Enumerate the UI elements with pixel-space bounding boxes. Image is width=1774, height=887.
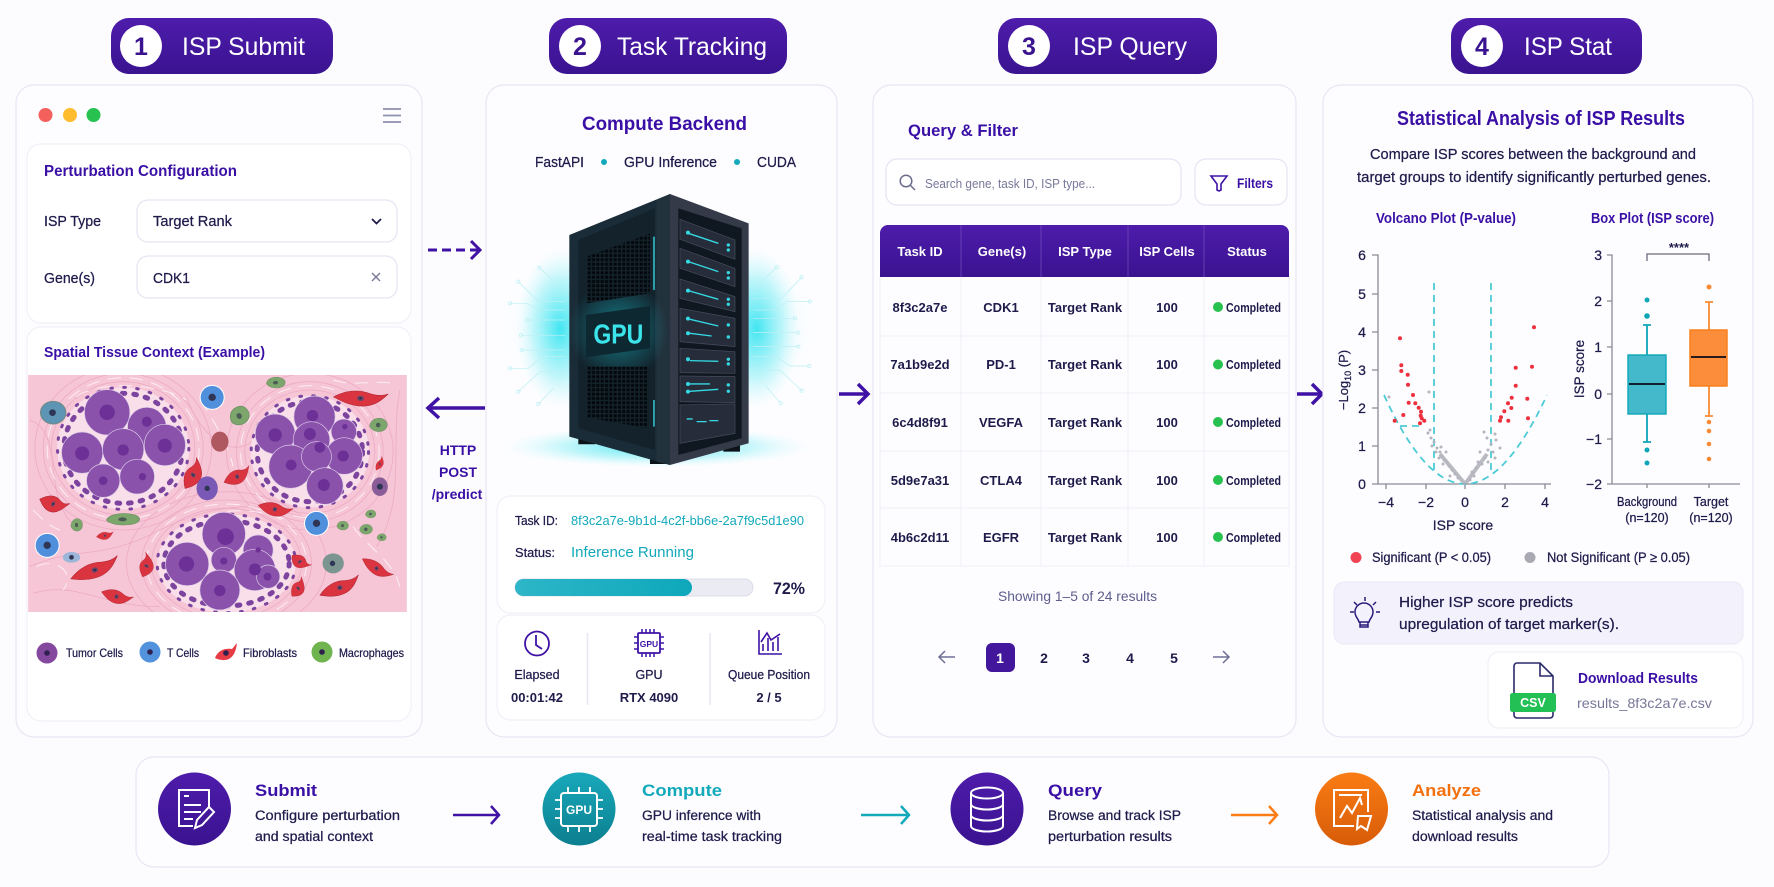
pagination: 1 [996, 650, 1004, 666]
card: spatial tissue context: Spatial Tissue Context (Example) [44, 345, 265, 361]
card: task status: Status: [515, 545, 555, 560]
chart: volcano plot: 6 [1358, 247, 1366, 263]
table row: 6c4d8f91: Target Rank [1048, 415, 1123, 430]
chart: volcano plot [1336, 211, 1551, 533]
legend: cell types [36, 642, 404, 664]
table row: 8f3c2a7e: Target Rank [1048, 300, 1123, 315]
step: Analyze [1315, 772, 1553, 846]
table row: 4b6c2d11 [891, 530, 1281, 545]
chart: volcano plot: 4 [1358, 324, 1366, 340]
pagination: 3 [1082, 650, 1090, 666]
table header row: ISP Type [1058, 244, 1112, 259]
step: Query [950, 772, 1181, 846]
card: perturbation configuration: Gene(s) [44, 271, 95, 287]
arrow: backend to query [839, 384, 868, 404]
icon: CSV file [1510, 663, 1556, 718]
chart: volcano plot: 10 [1343, 371, 1353, 381]
description [1357, 146, 1711, 186]
legend item: fibroblasts: Fibroblasts [243, 646, 297, 660]
chart: box plot: 3 [1594, 247, 1602, 263]
chart: box plot: Background [1617, 495, 1677, 509]
icon: clock [525, 632, 549, 656]
icon: GPU server tower: GPU [593, 318, 643, 349]
pagination: 5 [1170, 650, 1178, 666]
chart: box plot: −1 [1586, 431, 1602, 447]
step: Compute: Compute [642, 781, 722, 800]
icon: database [950, 772, 1024, 846]
results count: Showing 1–5 of 24 results [998, 589, 1157, 604]
metric: queue position: 2 / 5 [756, 690, 782, 705]
pagination: 4 [1126, 650, 1134, 666]
table row: 4b6c2d11: Completed [1226, 530, 1281, 545]
icon: GPU chip [634, 629, 664, 657]
icon: GPU chip: GPU [640, 639, 658, 649]
table row: 5d9e7a31 [891, 473, 1281, 488]
arrow: submit to compute [453, 806, 499, 824]
panel: workflow summary [136, 757, 1609, 867]
card: download results [1488, 652, 1743, 728]
metric: queue position [728, 668, 810, 705]
icon: submit form [158, 772, 231, 846]
step: Analyze: Analyze [1412, 781, 1481, 800]
window controls [38, 108, 401, 122]
chart: box plot: Box Plot (ISP score) [1591, 211, 1714, 227]
chart: box plot: Target [1694, 495, 1729, 509]
step header 4: ISP Stat [1451, 18, 1642, 74]
table row: 8f3c2a7e [893, 300, 1281, 315]
step: Query: perturbation results [1048, 829, 1172, 844]
results table [880, 225, 1289, 566]
metric: queue position: Queue Position [728, 668, 810, 682]
pagination [939, 643, 1229, 672]
table row: 8f3c2a7e: 8f3c2a7e [893, 300, 947, 315]
metric: GPU [620, 668, 678, 705]
panel: ISP Stat [1323, 85, 1753, 737]
legend item: macrophages: Macrophages [339, 646, 404, 660]
table row: 5d9e7a31: CTLA4 [980, 473, 1023, 488]
table row: 4b6c2d11: EGFR [983, 530, 1020, 545]
tech stack row: CUDA [757, 155, 796, 171]
panel: ISP Query [873, 85, 1296, 737]
step: Compute: GPU inference with [642, 808, 761, 823]
step header 1: ISP Submit: 1 [134, 33, 148, 61]
arrow: dashed submit to backend [428, 241, 480, 259]
card: download results: Download Results [1578, 670, 1698, 687]
card: task status: Inference Running [571, 544, 694, 561]
card: perturbation configuration: Target Rank [153, 214, 233, 230]
icon: GPU server tower [503, 194, 817, 467]
step: Query: Query [1048, 781, 1103, 800]
callout: interpretation [1334, 582, 1743, 644]
chart: volcano plot: 4 [1541, 494, 1549, 510]
table row: 8f3c2a7e: 100 [1156, 300, 1178, 315]
arrow: response back to submit [428, 398, 485, 418]
chart: volcano plot: 3 [1358, 362, 1366, 378]
step header 3: ISP Query: ISP Query [1073, 33, 1187, 61]
chart: volcano plot: (P) [1336, 350, 1351, 371]
icon: GPU chip badge: GPU [566, 803, 592, 817]
icon: CSV file: CSV [1520, 696, 1547, 710]
step: Submit: Configure perturbation [255, 808, 400, 823]
tissue illustration [28, 367, 407, 635]
chart: box plot: −2 [1586, 476, 1602, 492]
chart: box plot: **** [1669, 240, 1690, 255]
table row: 4b6c2d11: 4b6c2d11 [891, 530, 949, 545]
tech stack row [535, 155, 796, 171]
card: task status: 72% [773, 579, 805, 598]
search field [886, 159, 1181, 205]
table row: 4b6c2d11: 100 [1156, 530, 1178, 545]
table header row: Task ID [897, 244, 943, 259]
step header 1: ISP Submit: ISP Submit [182, 33, 305, 61]
step header 3: ISP Query [998, 18, 1217, 74]
card: perturbation configuration: Perturbation Configuration [44, 163, 237, 180]
callout: interpretation: Higher ISP score predicts [1399, 594, 1573, 611]
step header 3: ISP Query: 3 [1022, 33, 1036, 61]
step: Submit [158, 772, 400, 846]
table row: 8f3c2a7e: CDK1 [983, 300, 1019, 315]
card: download results: results_8f3c2a7e.csv [1577, 695, 1712, 711]
table header row: ISP Cells [1139, 244, 1195, 259]
legend item: fibroblasts [215, 643, 297, 660]
table header row [880, 225, 1289, 277]
metric: elapsed: 00:01:42 [511, 690, 563, 705]
tech stack row: GPU Inference [624, 155, 717, 171]
chart: box plot: (n=120) [1625, 511, 1669, 525]
chart: box plot: 0 [1594, 386, 1602, 402]
table row: 7a1b9e2d: PD-1 [986, 357, 1016, 372]
table row: 6c4d8f91: 100 [1156, 415, 1178, 430]
description: target groups to identify significantly perturbed genes. [1357, 169, 1711, 186]
table header row: Gene(s) [978, 244, 1026, 259]
search field: Search gene, task ID, ISP type... [925, 176, 1095, 191]
step header 2: Task Tracking: Task Tracking [617, 33, 767, 61]
table row: 5d9e7a31: Completed [1226, 473, 1281, 488]
legend item: macrophages [312, 642, 404, 662]
description: Compare ISP scores between the background and [1370, 146, 1696, 163]
table row: 5d9e7a31: 5d9e7a31 [891, 473, 949, 488]
table row: 7a1b9e2d [890, 357, 1281, 372]
metric: GPU: GPU [635, 668, 663, 682]
table row: 7a1b9e2d: Completed [1226, 357, 1281, 372]
chart: volcano plot: 5 [1358, 286, 1366, 302]
label: HTTP POST /predict [432, 442, 483, 502]
label: HTTP POST /predict: HTTP [440, 442, 476, 458]
card: perturbation configuration: CDK1 [153, 271, 190, 287]
chart: volcano plot: 2 [1501, 494, 1509, 510]
legend item: tumor cells: Tumor Cells [66, 646, 123, 660]
step header 2: Task Tracking [549, 18, 787, 74]
arrow: query to analyze [1231, 806, 1277, 824]
panel: ISP Submit [16, 85, 422, 737]
chart: volcano plot: 0 [1358, 476, 1366, 492]
legend item: T cells: T Cells [167, 646, 199, 660]
step header 2: Task Tracking: 2 [573, 33, 587, 61]
filters button [1195, 159, 1287, 205]
tech stack row: FastAPI [535, 155, 584, 171]
chart legend: Significant (P < 0.05) [1372, 550, 1491, 565]
chart: volcano plot: ISP score [1433, 517, 1493, 533]
step: Analyze: download results [1412, 829, 1518, 844]
card: perturbation configuration [27, 144, 411, 323]
table row: 8f3c2a7e: Completed [1226, 300, 1281, 315]
icon: GPU chip badge [542, 772, 616, 846]
chart: box plot: ISP score [1572, 340, 1587, 398]
chart: volcano plot: Volcano Plot (P-value) [1376, 211, 1516, 227]
step header 1: ISP Submit [111, 18, 333, 74]
pagination: 2 [1040, 650, 1048, 666]
panel: Task Tracking [486, 85, 837, 737]
icon: analysis report [1315, 772, 1388, 846]
chart legend: Not Significant (P ≥ 0.05) [1547, 550, 1690, 565]
chart: volcano plot: −4 [1378, 494, 1394, 510]
chart: box plot [1572, 211, 1740, 525]
table row: 6c4d8f91: 6c4d8f91 [892, 415, 948, 430]
legend item: T cells [140, 642, 199, 662]
card: task status: 8f3c2a7e-9b1d-4c2f-bb6e-2a7f9c5d1e90 [571, 513, 804, 528]
chart: box plot: (n=120) [1689, 511, 1733, 525]
card: task status: Task ID: [515, 513, 558, 528]
chart: volcano plot: −Log [1336, 381, 1351, 410]
table row: 4b6c2d11: Target Rank [1048, 530, 1123, 545]
table row: 6c4d8f91 [892, 415, 1281, 430]
arrow: query to stat [1297, 384, 1322, 404]
icon: light bulb [1350, 597, 1380, 627]
step: Analyze: Statistical analysis and [1412, 808, 1553, 823]
label: HTTP POST /predict: /predict [432, 486, 483, 502]
legend item: tumor cells [36, 642, 123, 664]
step header 4: ISP Stat: 4 [1475, 33, 1489, 61]
teal box: background group [1628, 298, 1666, 466]
card: perturbation configuration: ISP Type [44, 214, 101, 230]
table row: 7a1b9e2d: Target Rank [1048, 357, 1123, 372]
heading: Query and Filter: Query & Filter [908, 121, 1018, 140]
chart legend [1350, 550, 1690, 565]
table row: 5d9e7a31: 100 [1156, 473, 1178, 488]
step header 4: ISP Stat: ISP Stat [1524, 33, 1612, 61]
chart: box plot: 1 [1594, 339, 1602, 355]
chart: volcano plot: 2 [1358, 400, 1366, 416]
metric: elapsed [511, 668, 563, 705]
chart: box plot: 2 [1594, 293, 1602, 309]
metric: GPU: RTX 4090 [620, 690, 678, 705]
table row: 7a1b9e2d: 7a1b9e2d [890, 357, 950, 372]
step: Compute: real-time task tracking [642, 829, 782, 844]
table row: 5d9e7a31: Target Rank [1048, 473, 1123, 488]
card: runtime metrics [497, 615, 825, 720]
label: HTTP POST /predict: POST [439, 464, 478, 480]
card: spatial tissue context [27, 327, 411, 721]
step: Submit: and spatial context [255, 829, 373, 844]
step: Submit: Submit [255, 781, 317, 800]
card: task status [497, 496, 825, 613]
table row: 7a1b9e2d: 100 [1156, 357, 1178, 372]
icon: queue chart [759, 630, 782, 654]
orange box: target group [1690, 284, 1727, 461]
table row: 6c4d8f91: VEGFA [979, 415, 1024, 430]
table row: 6c4d8f91: Completed [1226, 415, 1281, 430]
table header row: Status [1227, 244, 1267, 259]
callout: interpretation: upregulation of target marker(s). [1399, 616, 1619, 633]
chart: volcano plot: 0 [1461, 494, 1469, 510]
heading: Compute Backend: Compute Backend [582, 114, 747, 135]
heading: statistical analysis: Statistical Analysis of ISP Results [1397, 108, 1685, 130]
step: Query: Browse and track ISP [1048, 808, 1181, 823]
chart: volcano plot: 1 [1358, 438, 1366, 454]
arrow: compute to query [861, 806, 909, 824]
step: Compute [542, 772, 782, 846]
filters button: Filters [1237, 176, 1273, 191]
chart: volcano plot: −2 [1418, 494, 1434, 510]
metric: elapsed: Elapsed [514, 668, 560, 682]
progress bar [515, 579, 753, 596]
